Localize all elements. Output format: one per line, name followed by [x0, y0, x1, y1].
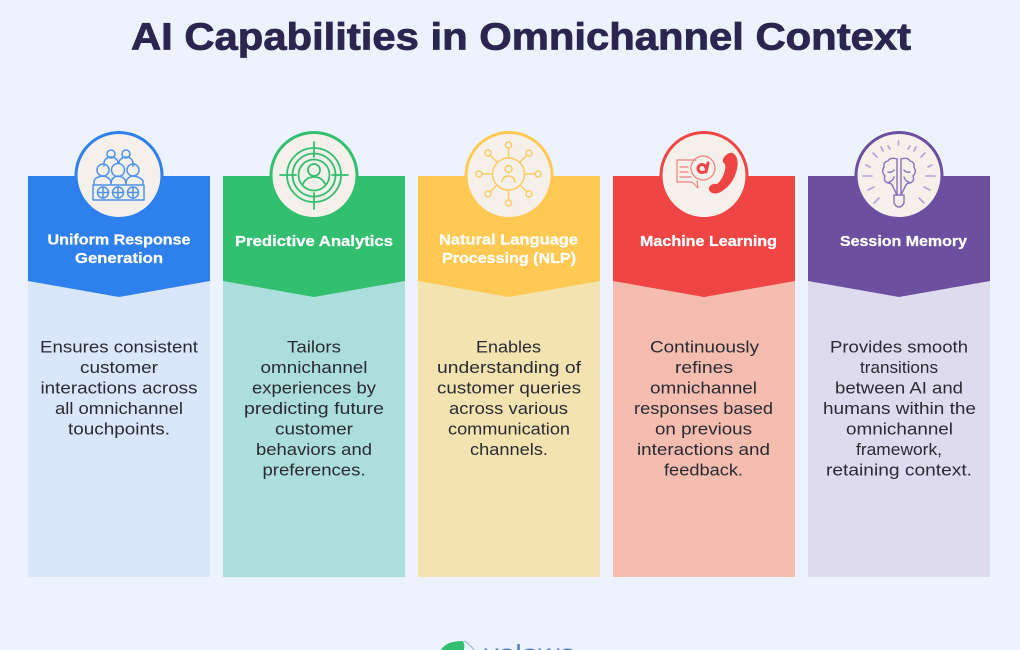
panel: Natural Language Processing — [418, 132, 600, 577]
description: feedback. — [664, 462, 743, 480]
description: all omnichannel — [55, 400, 183, 418]
panel: Predictive Analytics — [223, 132, 405, 577]
description: customer queries — [437, 380, 581, 398]
description — [634, 338, 773, 480]
description: omnichannel — [846, 420, 953, 438]
description: interactions across — [40, 380, 198, 398]
heading: Machine Learning — [640, 234, 777, 250]
description: Continuously — [650, 338, 760, 356]
panel: Uniform Response Generation — [28, 132, 210, 577]
description: experiences by — [252, 380, 377, 398]
description: Provides smooth — [830, 338, 968, 356]
heading: Natural Language — [439, 232, 578, 248]
icon: audience group — [76, 132, 162, 218]
description: between AI and — [835, 380, 963, 398]
description: Enables — [476, 338, 541, 356]
description: transitions — [860, 359, 938, 377]
description: across various — [449, 400, 568, 418]
description: customer — [275, 420, 354, 438]
description: Tailors — [287, 338, 341, 356]
description: omnichannel — [650, 380, 757, 398]
heading — [439, 232, 578, 267]
description: communication — [448, 420, 570, 438]
icon: chat and phone — [661, 132, 747, 218]
heading: Session Memory — [840, 234, 967, 250]
description: omnichannel — [260, 359, 368, 377]
logo (cropped at bottom edge) — [441, 640, 576, 650]
heading — [48, 232, 190, 267]
description: interactions and — [637, 441, 770, 459]
icon: network hub with person — [466, 132, 552, 218]
description: framework, — [856, 441, 942, 459]
description: retaining context. — [826, 462, 972, 480]
description: customer — [80, 359, 159, 377]
description — [823, 338, 976, 480]
description: predicting future — [244, 400, 384, 418]
description: humans within the — [823, 400, 976, 418]
description: preferences. — [262, 462, 366, 480]
description: responses based — [634, 400, 773, 418]
panel: Session Memory — [808, 132, 990, 577]
description: channels. — [470, 441, 548, 459]
description: understanding of — [437, 359, 581, 377]
icon: target with person — [271, 132, 357, 218]
description: on previous — [655, 420, 752, 438]
description — [40, 338, 198, 438]
icon: brain light bulb — [856, 132, 942, 218]
description — [244, 338, 384, 480]
description: Ensures consistent — [40, 338, 198, 356]
title: AI Capabilities in Omnichannel Context — [131, 16, 911, 58]
panel: Machine Learning — [613, 132, 795, 577]
description — [437, 338, 581, 459]
description: touchpoints. — [68, 420, 170, 438]
heading: Processing (NLP) — [442, 251, 576, 267]
description: behaviors and — [256, 441, 372, 459]
heading: Generation — [75, 251, 163, 267]
heading: Uniform Response — [48, 232, 190, 248]
description: refines — [675, 359, 733, 377]
heading: Predictive Analytics — [235, 234, 393, 250]
